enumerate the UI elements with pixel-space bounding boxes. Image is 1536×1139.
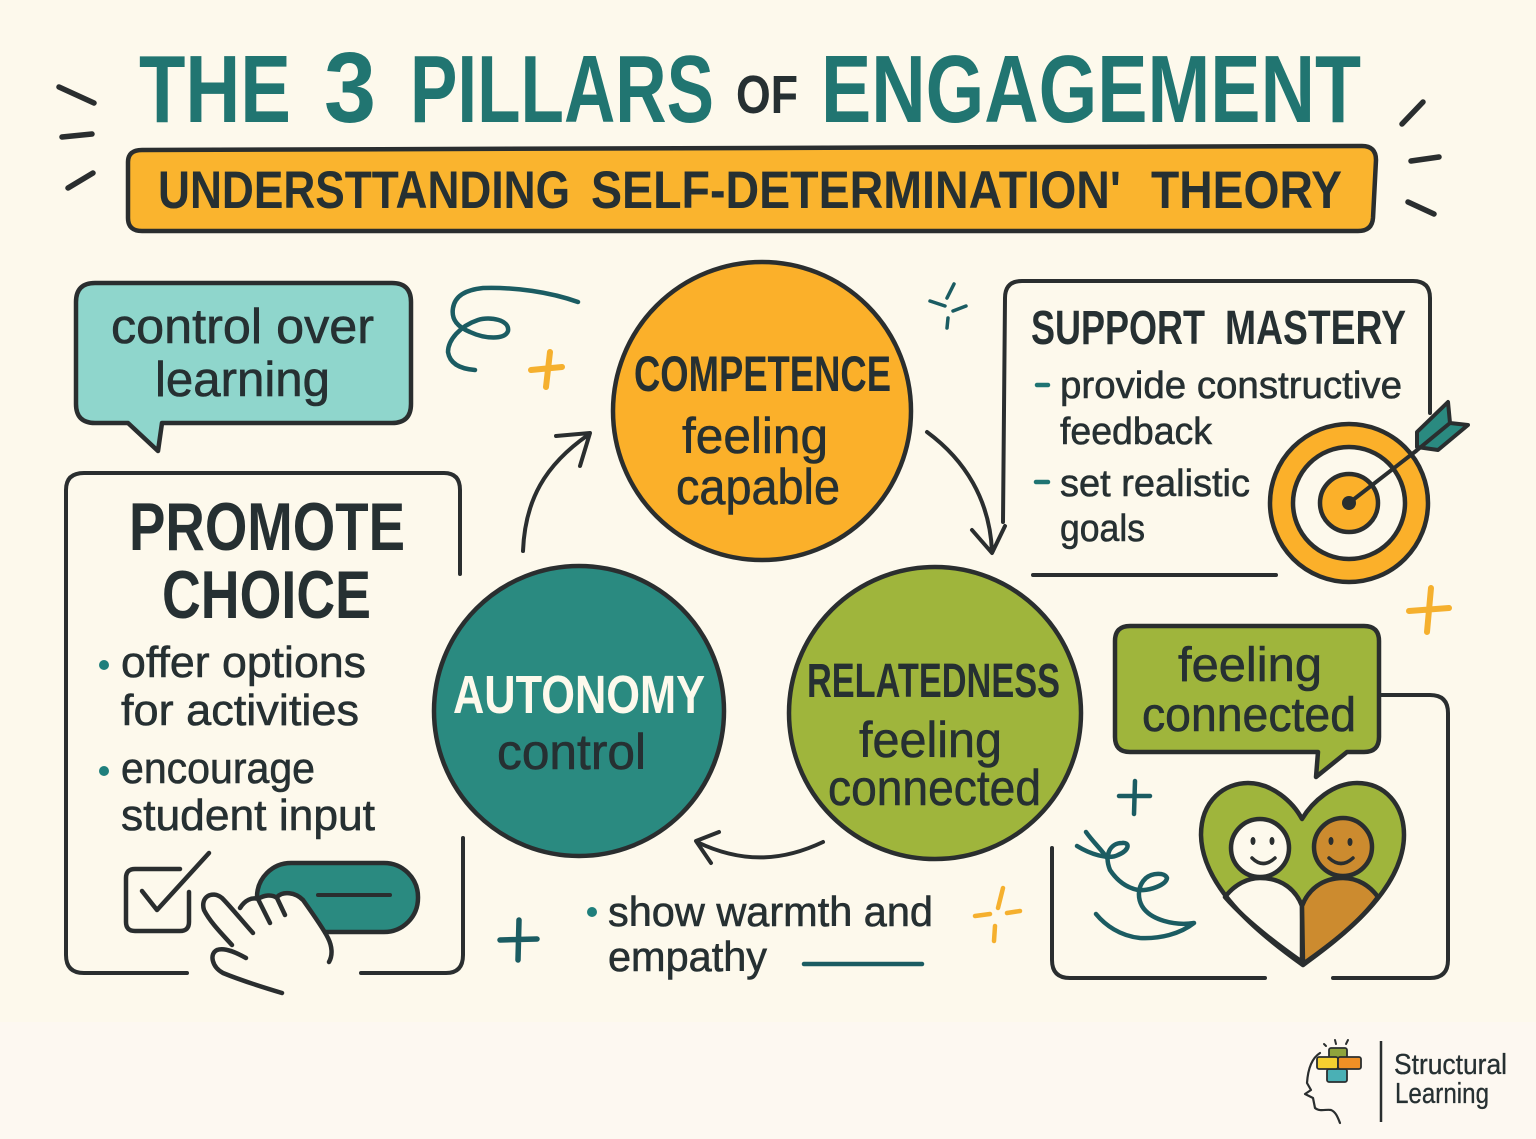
icon: checkbox <box>126 853 209 931</box>
circle: relatedness: RELATEDNESS <box>807 655 1060 708</box>
heading: support mastery: MASTERY <box>1225 302 1406 355</box>
bullets: promote choice: student input <box>121 791 375 840</box>
doodle: teal sparkle <box>930 284 966 328</box>
circle: competence: feeling <box>682 408 828 464</box>
bullets: promote choice <box>99 638 375 840</box>
callout: feeling connected: connected <box>1142 689 1356 742</box>
callout: feeling connected <box>1115 626 1379 777</box>
icon: heart with two people <box>1201 783 1404 965</box>
circle: competence: COMPETENCE <box>634 346 891 402</box>
bullets: promote choice: for activities <box>121 686 359 735</box>
arrow: autonomy to competence <box>523 433 590 551</box>
bullets: promote choice: encourage <box>121 744 315 793</box>
bullets: support mastery: feedback <box>1060 411 1213 453</box>
text block: show warmth and empathy: empathy <box>608 933 767 980</box>
circle: relatedness: feeling <box>859 712 1002 768</box>
bullets: support mastery: set realistic <box>1060 463 1250 505</box>
title: PILLARS <box>410 36 714 143</box>
text block: show warmth and empathy: show warmth and <box>608 888 933 935</box>
callout: control over learning <box>76 283 411 451</box>
circle: autonomy <box>434 566 724 856</box>
title accent marks left <box>59 87 94 188</box>
circle: relatedness <box>789 567 1081 859</box>
panel outline: relatedness support <box>1052 695 1448 978</box>
callout: control over learning: learning <box>155 353 330 407</box>
subtitle banner <box>128 146 1376 231</box>
bullets: support mastery <box>1036 365 1402 550</box>
icon: orange plus right <box>1409 588 1449 632</box>
circle: competence <box>613 262 911 560</box>
arrow: competence to relatedness <box>927 432 1005 553</box>
title: THE <box>139 36 291 143</box>
title <box>139 32 1361 144</box>
heading: support mastery: SUPPORT <box>1031 302 1205 355</box>
subtitle banner: THEORY <box>1151 161 1342 220</box>
icon: target with arrow <box>1270 402 1468 582</box>
subtitle banner: UNDERSTTANDING <box>158 161 570 220</box>
icon: pointing hand <box>203 893 332 993</box>
heading: support mastery <box>1031 302 1406 355</box>
icon: orange plus <box>531 352 562 387</box>
doodle: teal curl <box>1077 832 1194 938</box>
icon: teal toggle button <box>257 863 418 932</box>
logo: structural learning <box>1305 1040 1507 1123</box>
doodle: teal squiggle <box>448 288 578 370</box>
icon: teal plus <box>1119 781 1150 814</box>
title: 3 <box>324 32 376 144</box>
icon: teal plus bottom <box>500 920 537 960</box>
logo wordmark: Learning <box>1395 1078 1489 1110</box>
panel: promote choice <box>66 473 463 993</box>
callout: feeling connected: feeling <box>1178 639 1322 692</box>
circle: relatedness: connected <box>828 760 1041 816</box>
doodle: orange sparkle <box>975 888 1020 941</box>
arrow: relatedness to autonomy <box>696 832 823 863</box>
bullets: promote choice: offer options <box>121 638 366 687</box>
title: ENGAGEMENT <box>821 36 1361 143</box>
text block: show warmth and empathy <box>587 888 933 980</box>
subtitle banner: SELF-DETERMINATION' <box>591 161 1121 220</box>
logo wordmark: Structural <box>1394 1049 1507 1081</box>
title accent marks right <box>1402 102 1439 214</box>
title: OF <box>736 65 798 125</box>
circle: competence: capable <box>676 459 840 515</box>
heading: promote choice: CHOICE <box>162 557 371 633</box>
heading: promote choice: PROMOTE <box>129 489 405 565</box>
panel: support mastery <box>1003 281 1468 582</box>
callout: control over learning: control over <box>111 300 374 354</box>
heading: promote choice <box>129 489 405 633</box>
icon: head with blocks <box>1305 1040 1361 1123</box>
logo wordmark <box>1394 1049 1507 1110</box>
bullets: support mastery: goals <box>1060 508 1145 550</box>
circle: autonomy: control <box>497 724 646 780</box>
bullets: support mastery: provide constructive <box>1060 365 1402 407</box>
circle: autonomy: AUTONOMY <box>453 665 705 725</box>
